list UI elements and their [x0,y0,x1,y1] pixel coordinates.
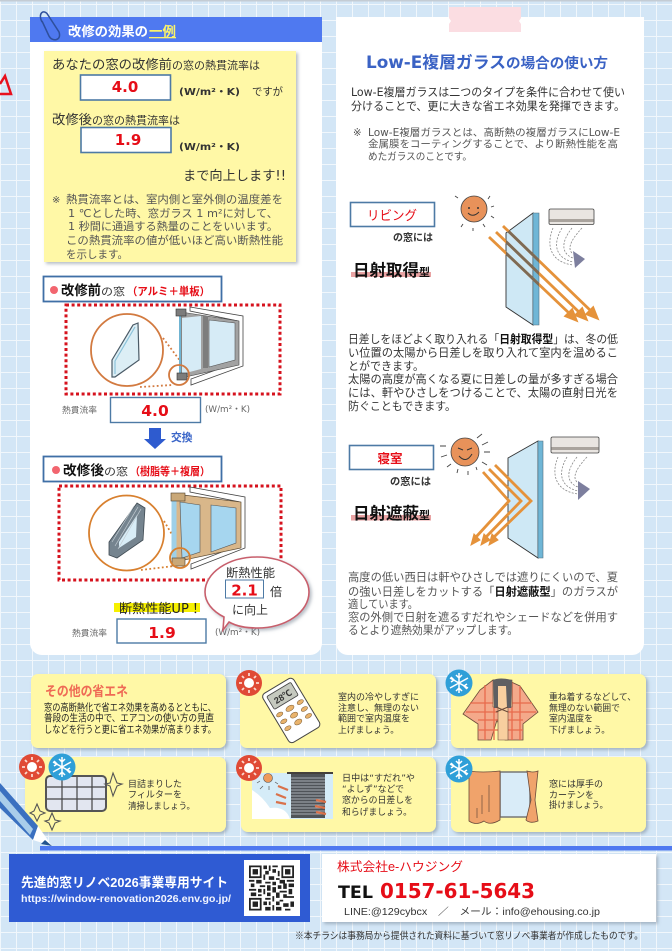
note text [52,192,283,261]
card: remote control [236,670,436,748]
frame: before window illustration [66,305,280,394]
text: 和らげましょう。 [342,807,412,818]
value after [81,128,171,152]
text [338,691,419,736]
icon: jacket [463,678,538,740]
heading bar: 一例 [149,25,176,40]
callout bubble: 2.1 times [205,557,309,630]
icon: air conditioner [551,437,599,453]
note text: 1 ℃とした時、窓ガラス 1 m²に対して、 [68,207,278,220]
icon: glass pane [508,441,538,558]
arrow: replace: 交換 [171,430,193,444]
title: の場合の使い方 [506,55,608,72]
text: solar gain description: 日差しをほどよく取り入れる「日射取得型」は、冬の低 [348,332,618,346]
callout: thermal transmittance: ですが [252,85,283,98]
note text [353,126,620,163]
label: living room: の窓には [393,231,434,244]
label: bedroom: の窓には [390,475,432,488]
icon: curtain [469,771,538,824]
text: solar shielding description: 適しています。 [348,597,418,611]
text: 注意し、無理のない [338,702,419,714]
intro text [351,85,625,113]
callout: thermal transmittance [44,51,296,262]
heading: after renovation window: 改修後 [63,462,105,479]
icon: resin window [170,487,245,569]
card: blinds [236,755,436,832]
text: solar gain description: い位置の太陽から日差しを取り入れて室内を温めるこ [348,346,618,360]
text: solar shielding description: の強い日差しをカットする「日射遮蔽型」のガラスが [348,584,618,598]
value after: 1.9 [115,131,141,149]
heading: before renovation window: （アルミ＋単板） [127,284,210,298]
label: solar gain type: 型 [419,266,430,279]
text: カーテンを [549,790,594,801]
text: 範囲で室内温度を [338,712,410,724]
note text: ※ [52,195,60,206]
after value row: (W/m²・K) [215,628,260,638]
heading: after renovation window: の窓 [104,466,129,478]
decorative blue rule [40,846,672,850]
panel: effect of renovation [30,12,322,655]
callout: thermal transmittance: まで向上します!! [183,168,286,184]
icon: sun [440,434,490,475]
note text: 金属膜をコーティングすることで、より断熱性能を高 [368,138,618,150]
icon: remote control: 28℃ [272,688,294,706]
label: bedroom: 寝室 [377,451,403,466]
panel: Low-E usage [336,7,644,655]
callout bubble: 2.1 times: 断熱性能 [226,566,275,580]
note text: 1 秒間に通過する熱量のことをいいます。 [68,219,278,233]
before value row: 熱貫流率 [62,404,97,416]
before value row: 4.0 [141,402,169,420]
panel: contact: TEL [338,883,373,903]
text: solar shielding description: 高度の低い西日は軒やひさしでは遮りにくいので、夏 [348,571,618,584]
text: 窓からの日差しを [342,794,413,806]
text: solar gain description: には、軒やひさしをつけることで、太陽の直射日光を [348,386,618,400]
heading: after renovation window: （樹脂等＋複層） [130,464,210,478]
callout: thermal transmittance: (W/m²・K) [179,142,240,153]
icon: triple glass cross-section [89,496,164,570]
icon: remote control [261,677,321,744]
value before: 4.0 [112,78,138,96]
icon: warm air flow [550,228,585,268]
intro text: Low-E複層ガラスは二つのタイプを条件に合わせて使い [351,85,625,99]
label: solar gain type: 日射取得 [353,261,419,280]
icon: paper clip [40,12,60,40]
icon: pencil [0,783,52,846]
text: 日中は“すだれ”や [342,772,415,784]
panel: contact: 0157-61-5643 [380,879,535,903]
card: other energy saving: しなどを行うと更に省エネ効果が高まります。 [44,723,216,736]
icon: leader dots [140,338,181,387]
icon: leader dots [141,521,180,570]
icon: air filter [30,773,122,830]
text: solar gain description [348,332,618,413]
banner: program site: 先進的窓リノベ2026事業専用サイト [21,875,228,890]
text [549,691,636,736]
callout: thermal transmittance: の窓の熱貫流率は [172,59,260,72]
callout: thermal transmittance: の窓の熱貫流率は [92,114,180,127]
icon: snow badge [48,754,76,780]
heading bar: 改修の効果の [68,24,148,40]
note text: ※ [353,128,362,139]
card: thick curtains [446,756,646,832]
icon: QR code [244,860,300,916]
text [549,778,608,811]
label: living room: リビング [367,209,417,224]
text: 室内温度を [549,712,593,724]
icon: sun badge [236,670,262,696]
text [342,772,415,818]
arrow: replace [144,428,193,449]
card: other energy saving: 窓の高断熱化で省エネ効果を高めるとともに、 [44,701,216,714]
label: solar shielding type: 型 [419,509,430,522]
text: “よしず”などで [342,784,404,795]
callout: thermal transmittance: (W/m²・K) [179,87,240,98]
panel: contact [322,854,656,922]
icon: blinds and sun [252,772,333,819]
callout bubble: 2.1 times: に向上 [232,602,268,617]
panel: contact: 株式会社e-ハウジング [337,859,463,874]
icon: aluminium window [169,307,243,385]
text: solar gain description: 防ぐこともできます。 [348,399,456,413]
text: 清掃しましょう。 [128,800,195,812]
card: filter cleaning [19,754,226,832]
frame: after window illustration [59,486,281,580]
icon: snow badge [446,670,472,696]
text: solar gain description: とができます。 [348,359,424,373]
intro text: 分けることで、更に大きな省エネ効果を発揮できます。 [351,99,625,113]
callout bubble: 2.1 times: 2.1 [231,582,258,600]
banner: program site: https://window-renovation2026.env.go.jp/ [21,894,231,905]
label: performance up: 断熱性能UP！ [119,602,202,617]
text: 重ね着するなどして、 [549,691,636,703]
after value row [72,619,260,643]
icon: glass pane [506,213,533,325]
banner: program site [9,854,310,922]
arrows: sunlight reflected [476,465,531,537]
text: 無理のない範囲で [549,702,620,714]
title: Low-E複層ガラス [366,52,506,72]
heading: before renovation window: 改修前 [61,282,101,299]
label: bedroom [350,446,434,488]
arrows: sunlight passing through [489,226,597,320]
after value row: 1.9 [148,624,176,642]
value before [80,75,170,100]
text: solar gain description: 太陽の高度が高くなる夏に日差しの量が多すぎる場合 [348,372,618,386]
text [128,778,195,812]
heading: after renovation window [44,456,222,482]
title [366,52,608,72]
diagram: solar shielding glass [440,434,599,558]
note text: この熱貫流率の値が低いほど高い断熱性能 [66,233,283,247]
note text: Low-E複層ガラスとは、高断熱の複層ガラスにLow-E [368,126,620,139]
text: solar shielding description: 窓の外側で日射を遮るすだれやシェードなどを併用す [348,610,618,624]
callout bubble: 2.1 times: 倍 [270,584,282,599]
card: other energy saving: その他の省エネ [45,684,128,700]
diagram: solar gain glass [455,196,597,325]
decorative red triangle fragment [0,76,11,94]
text: solar shielding description [348,571,618,637]
label: solar shielding type: 日射遮蔽 [353,504,420,523]
icon: snow badge [446,756,472,782]
callout: thermal transmittance: 改修後 [52,112,92,128]
icon: cool air flow [555,457,590,500]
text: 掛けましょう。 [549,799,608,811]
card: other energy saving: 普段の生活の中で、エアコンの使い方の見直 [44,712,214,724]
heading: before renovation window: の窓 [101,286,126,298]
icon: sun badge [236,755,262,781]
note text: 熱貫流率とは、室内側と室外側の温度差を [66,192,283,206]
text: 目詰まりした [128,778,182,790]
text: 上げましょう。 [338,725,399,736]
heading: before renovation window [44,276,222,302]
card: other energy saving [31,674,226,748]
icon: sun badge [19,754,45,780]
card: layered clothing [446,670,646,748]
label: living room [350,202,434,244]
icon: single glass cross-section [91,314,163,386]
text: solar shielding description: るとより遮熱効果がアップします。 [348,623,518,637]
callout: thermal transmittance: あなたの窓の改修前 [52,56,172,73]
icon: air conditioner [549,209,594,224]
panel: contact: LINE:@129cybcx ／ メール：info@ehousing.co.jp [344,906,600,918]
decorative tape [449,7,521,32]
text: フィルターを [128,790,182,800]
text: 室内の冷やしすぎに [338,691,419,703]
before value row: (W/m²・K) [205,405,250,415]
after value row: 熱貫流率 [72,627,107,639]
heading bar [30,17,322,42]
note text: めたガラスのことです。 [368,151,472,163]
before value row [62,398,250,422]
note text: を示します。 [66,248,128,261]
text: 窓には厚手の [549,778,603,790]
icon: sun [455,196,494,231]
text: 下げましょう。 [549,725,610,736]
